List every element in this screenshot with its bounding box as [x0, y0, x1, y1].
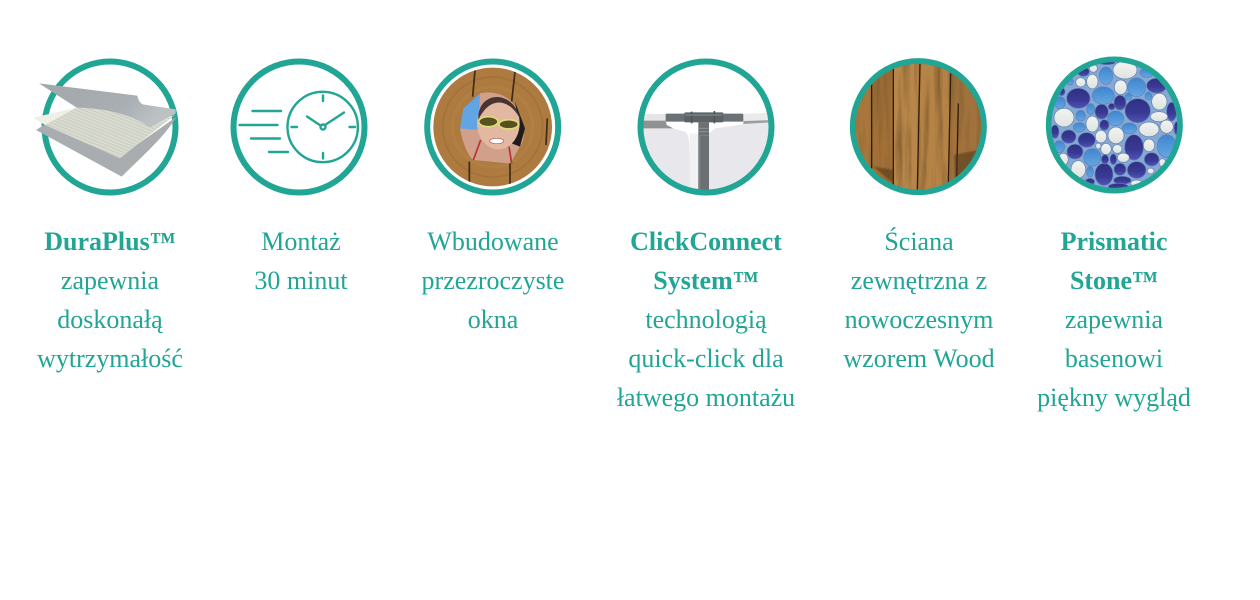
text: Ściana	[843, 227, 995, 373]
text: DuraPlus: DuraPlus™	[44, 227, 176, 256]
icon: DuraPlus material layers	[33, 62, 177, 192]
icon: wood wall	[850, 60, 987, 197]
text: Wbudowane okna: przezroczyste	[422, 266, 564, 295]
text: DuraPlus: wytrzymałość	[37, 344, 183, 373]
text: Prismatic Stone: Stone™	[1070, 266, 1158, 295]
text: ClickConnect: ClickConnect	[630, 227, 782, 256]
text: ClickConnect: System™	[653, 266, 759, 295]
icons row	[34, 56, 1183, 196]
icon: clock with speed lines	[234, 62, 364, 192]
text: Prismatic Stone: basenowi	[1065, 344, 1163, 373]
text: ClickConnect: technologią	[645, 305, 767, 334]
text: Prismatic Stone: piękny wygląd	[1037, 383, 1191, 412]
text: Ściana: Ściana	[884, 227, 954, 256]
text: ClickConnect: quick-click dla	[628, 344, 784, 373]
text: Ściana: nowoczesnym	[845, 305, 993, 334]
text: Prismatic Stone: zapewnia	[1065, 305, 1163, 334]
icon: Prismatic Stone pebbles	[1047, 57, 1183, 193]
text: Ściana: wzorem Wood	[843, 344, 995, 373]
text: ClickConnect: łatwego montażu	[617, 383, 795, 412]
text: Ściana: zewnętrzna z	[851, 266, 987, 295]
icon: window with swimmer	[427, 62, 558, 192]
text: Prismatic Stone: Prismatic	[1061, 227, 1167, 256]
text: Wbudowane okna: Wbudowane	[427, 227, 559, 256]
text: Montaż: 30 minut	[254, 266, 348, 295]
text: Wbudowane okna	[422, 227, 564, 334]
text: DuraPlus: doskonałą	[57, 305, 163, 334]
text: ClickConnect	[617, 227, 795, 412]
text: Wbudowane okna: okna	[468, 305, 518, 334]
text: Prismatic Stone	[1037, 227, 1191, 412]
icon: ClickConnect frame	[635, 62, 775, 196]
text: Montaż: Montaż	[261, 227, 341, 256]
text: DuraPlus: zapewnia	[61, 266, 159, 295]
text: DuraPlus	[37, 227, 183, 373]
text: Montaż	[254, 227, 348, 295]
